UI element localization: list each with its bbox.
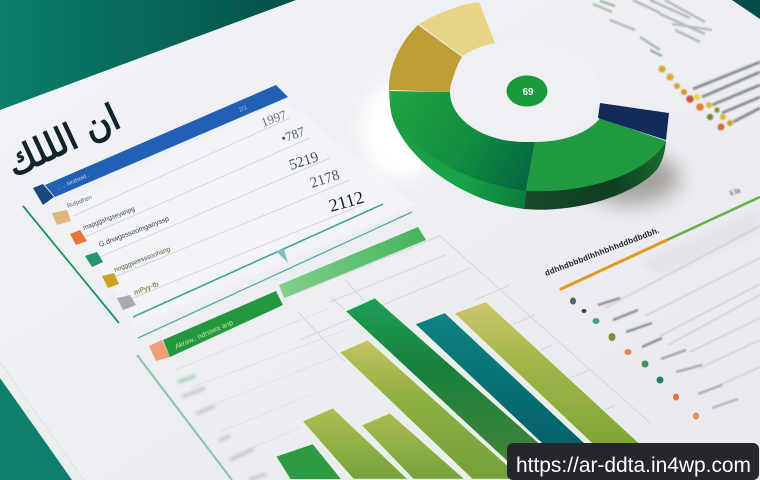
sheet lit edge	[0, 362, 84, 480]
teal rule lower	[138, 212, 412, 338]
list title: ddhhdbbbdlhhhbhhddbdbdbh.	[543, 226, 661, 278]
panel: donut chart	[360, 2, 680, 210]
header right caption: 2/1	[238, 105, 249, 114]
side left	[389, 91, 526, 209]
chart header salmon tab	[149, 340, 170, 361]
row swatch gray	[117, 295, 136, 310]
watermark label	[507, 443, 759, 480]
header bar	[45, 85, 288, 197]
segment gold	[389, 25, 462, 92]
bar olive middle	[338, 339, 525, 480]
value 4: 2178	[308, 167, 342, 192]
segment navy	[598, 103, 669, 140]
list labels	[598, 298, 738, 408]
chart header light green	[279, 227, 426, 298]
panel: bar chart	[137, 227, 680, 480]
segment green right	[526, 118, 666, 191]
teal tick	[276, 249, 288, 263]
legend dots	[658, 66, 733, 130]
header navy tab	[33, 184, 54, 205]
bar lime short	[360, 412, 467, 480]
list lines	[605, 226, 760, 385]
shadow	[580, 152, 680, 204]
center hole	[450, 42, 600, 142]
row labels: mPyy-fb	[133, 281, 160, 297]
row swatch tan	[52, 210, 71, 225]
chart left rule	[137, 355, 232, 480]
row labels: nogggseesssoohsng	[113, 246, 172, 274]
chart row lines	[175, 308, 345, 455]
green rule	[667, 197, 760, 240]
panel: top right legend	[593, 0, 760, 130]
row labels: G.dnwgsssoomgaoyssp	[98, 216, 170, 249]
value 3: 5219	[287, 149, 321, 174]
segment tan	[419, 2, 495, 56]
label text: https://ar-ddta.in4wp.com	[516, 454, 751, 477]
teal rule upper	[133, 204, 383, 317]
value 5: 2112	[327, 187, 366, 216]
row labels: Rofpdhen	[67, 195, 93, 210]
label background	[507, 443, 759, 480]
row swatch green	[85, 252, 103, 267]
bar teal	[414, 312, 625, 480]
center badge	[506, 76, 548, 106]
segment green left	[389, 91, 535, 191]
orange rule	[561, 240, 667, 289]
bar dark green	[344, 297, 582, 480]
panel: right list	[543, 187, 760, 420]
side right	[524, 141, 666, 210]
value 1: 1997	[259, 107, 289, 130]
chart header caption: Akraw.. ndnswa anp	[174, 319, 234, 351]
panel: data table	[0, 85, 415, 338]
chart axis labels	[178, 376, 266, 480]
bar olive right	[453, 301, 680, 480]
legend bars	[693, 62, 760, 122]
row swatch gold	[102, 273, 119, 288]
bottom left teal corner	[0, 355, 90, 480]
value 2: •787	[279, 123, 307, 146]
table row lines	[73, 118, 362, 300]
chart header dark green	[163, 291, 283, 357]
left green rule	[23, 206, 119, 323]
chart grid	[284, 236, 650, 423]
top right dark corner	[700, 0, 760, 40]
blurred labels	[593, 0, 712, 56]
bar green short	[275, 443, 343, 480]
header caption: .. ... hindsold ..	[56, 172, 92, 192]
bar olive short	[301, 407, 410, 480]
row labels	[67, 195, 172, 297]
row swatch orange	[70, 230, 87, 245]
corner caption: li.la	[729, 187, 742, 198]
list band	[640, 208, 760, 276]
row labels: mapggshgseyanpg	[82, 206, 136, 232]
list dots	[570, 298, 699, 420]
badge value: 69	[522, 87, 534, 98]
table sheet	[60, 100, 415, 326]
glow	[360, 80, 440, 180]
title: ان الللك	[0, 96, 127, 186]
